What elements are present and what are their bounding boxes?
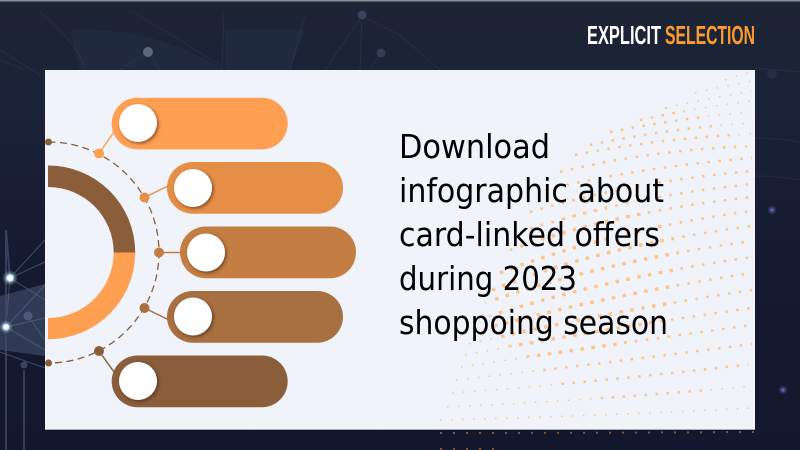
item 3 (154, 226, 356, 278)
heading text: during 2023 (399, 260, 577, 298)
item 2 (140, 162, 343, 214)
heading text: Download (399, 128, 550, 166)
heading text: shoppoing season (399, 304, 668, 342)
logo (587, 20, 755, 50)
half ring chart (48, 165, 135, 339)
white content panel (45, 70, 755, 430)
heading text: card-linked offers (399, 216, 660, 254)
heading text (399, 128, 668, 342)
item 4 (140, 291, 343, 343)
halftone dot wave (440, 72, 752, 420)
item 5 (94, 346, 288, 407)
heading text: infographic about (399, 172, 664, 210)
dashed orbit (45, 138, 159, 366)
item 1 (94, 98, 288, 158)
logo: EXPLICIT (587, 20, 661, 50)
